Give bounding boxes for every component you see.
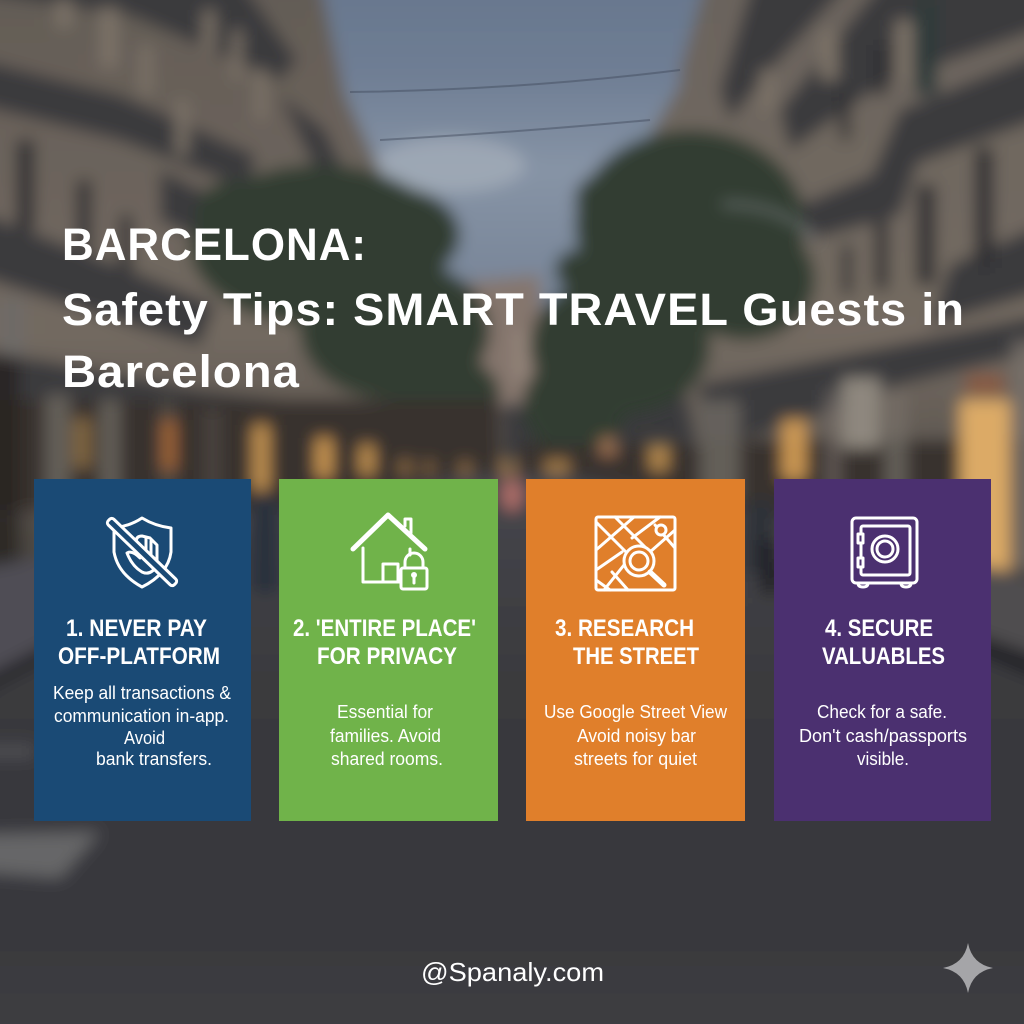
heading: [555, 615, 699, 670]
body text: visible.: [857, 749, 909, 769]
heading: OFF-PLATFORM: [58, 643, 220, 670]
body text: communication in-app.: [54, 706, 229, 726]
heading: [58, 615, 220, 670]
body text: [330, 702, 443, 769]
body text: shared rooms.: [331, 749, 443, 769]
heading: [822, 615, 945, 670]
body text: families. Avoid: [330, 726, 441, 746]
heading: VALUABLES: [822, 643, 945, 670]
panel: tip 1 never pay off-platform: [34, 479, 251, 821]
body text: Essential for: [337, 702, 433, 722]
body text: Check for a safe.: [817, 702, 947, 722]
title: Barcelona: [62, 346, 300, 397]
body text: [53, 683, 231, 769]
body text: Use Google Street View: [544, 702, 728, 722]
icon: safe: [852, 518, 917, 587]
body text: [544, 702, 728, 769]
title: [62, 219, 965, 397]
panel: tip 2 entire place for privacy: [279, 479, 498, 821]
body text: Don't cash/passports: [799, 726, 967, 746]
heading: 3. RESEARCH: [555, 615, 694, 642]
body text: [799, 702, 967, 769]
title: BARCELONA:: [62, 219, 367, 270]
body text: streets for quiet: [574, 749, 697, 769]
body text: Avoid noisy bar: [577, 726, 696, 746]
body text: Avoid: [124, 728, 165, 748]
body text: bank transfers.: [96, 749, 212, 769]
icon: shield with crossed-out hand: [106, 517, 178, 587]
icon: sparkle star: [943, 943, 993, 993]
footer handle: @Spanaly.com: [421, 957, 604, 987]
panel: tip 3 research the street: [526, 479, 745, 821]
heading: FOR PRIVACY: [317, 643, 457, 670]
heading: 4. SECURE: [825, 615, 933, 642]
body text: Keep all transactions &: [53, 683, 231, 703]
heading: [293, 615, 476, 670]
heading: 2. 'ENTIRE PLACE': [293, 615, 476, 642]
heading: THE STREET: [573, 643, 699, 670]
panel: tip 4 secure valuables: [774, 479, 991, 821]
title: Safety Tips: SMART TRAVEL Guests in: [62, 284, 965, 335]
heading: 1. NEVER PAY: [66, 615, 207, 642]
icon: map with magnifier: [596, 517, 675, 590]
icon: house with padlock: [353, 515, 427, 589]
